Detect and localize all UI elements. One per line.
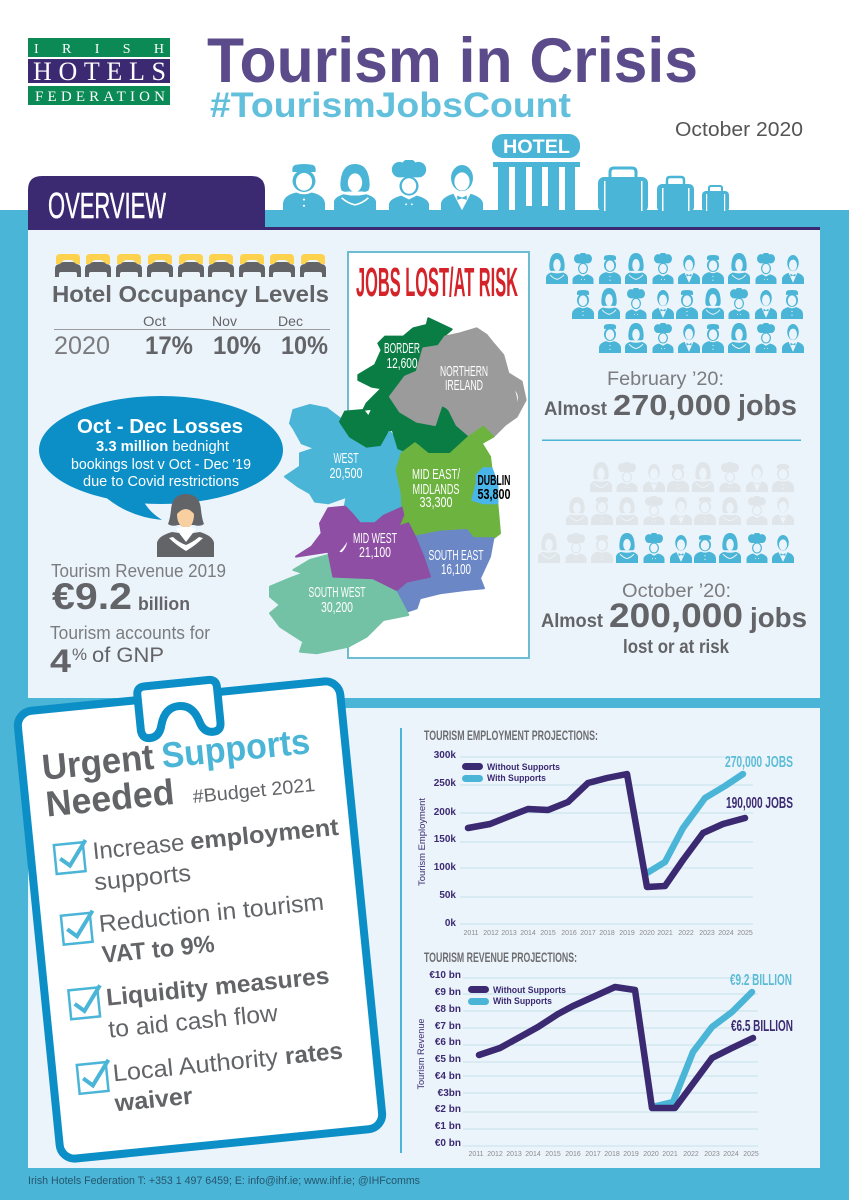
text: JOBS LOST/AT RISK <box>356 259 518 305</box>
legend: With Supports <box>487 773 546 784</box>
y axis labels: 0k <box>445 918 456 929</box>
x axis labels: 2016 <box>561 930 577 937</box>
x axis labels: 2011 <box>468 1151 484 1158</box>
x axis labels: 2021 <box>662 1151 678 1158</box>
logo: Irish Hotels Federation <box>28 38 170 105</box>
line: without supports <box>479 987 753 1108</box>
x axis labels: 2014 <box>520 930 536 937</box>
chart title: TOURISM REVENUE PROJECTIONS: <box>424 949 577 965</box>
y axis labels: 200k <box>434 807 456 818</box>
region: south west <box>270 555 408 653</box>
map labels: 30,200 <box>321 599 353 616</box>
callout: Oct - Dec losses: bookings lost v Oct - Dec '19 <box>71 456 251 473</box>
icon: bellhop <box>283 164 325 212</box>
y axis labels <box>434 750 456 929</box>
tourism revenue stat: €9.2 <box>52 576 132 617</box>
checklist item: rates waiver: rates <box>284 1038 344 1070</box>
x axis labels: 2018 <box>604 1151 620 1158</box>
y axis labels: €8 bn <box>435 1004 461 1015</box>
line: with supports <box>652 992 752 1107</box>
heading: urgent supports needed <box>40 720 315 825</box>
occupancy figures: 2020 <box>54 332 110 360</box>
x axis labels: 2019 <box>619 930 635 937</box>
checklist item: rates waiver <box>77 1037 347 1121</box>
month labels: Nov <box>212 313 237 329</box>
chart: tourism revenue projections <box>416 949 793 1158</box>
map labels: 16,100 <box>441 561 471 578</box>
y axis labels: 150k <box>434 834 456 845</box>
y axis labels: €5 bn <box>435 1054 461 1065</box>
x axis labels: 2021 <box>657 930 673 937</box>
map labels: 12,600 <box>386 355 418 372</box>
map labels: SOUTH WEST <box>308 584 366 601</box>
chart title: TOURISM EMPLOYMENT PROJECTIONS: <box>424 727 598 743</box>
GNP stat: % <box>72 645 87 664</box>
map labels <box>308 340 510 616</box>
x axis labels: 2013 <box>506 1151 522 1158</box>
map labels: 21,100 <box>359 544 391 561</box>
region: south east <box>395 530 493 612</box>
region: west <box>285 405 403 523</box>
clipboard: urgent supports needed <box>15 667 384 1160</box>
callout: Oct - Dec losses <box>39 396 283 520</box>
checklist item: employment supports: employment <box>189 814 340 856</box>
map labels: MID EAST/ <box>412 466 461 483</box>
checklist item: liquidity measures: to aid cash flow <box>107 1000 280 1044</box>
map labels: 53,800 <box>478 486 510 503</box>
map labels: IRELAND <box>445 377 483 394</box>
x axis labels: 2022 <box>678 930 694 937</box>
panel: jobs lost map <box>270 252 529 658</box>
x axis labels: 2015 <box>540 930 556 937</box>
x axis labels <box>463 930 753 937</box>
x axis labels: 2018 <box>599 930 615 937</box>
checklist item: employment supports: supports <box>93 860 192 896</box>
stat: October jobs: lost or at risk <box>623 637 729 658</box>
occupancy figures: 17% <box>145 332 193 360</box>
y axis labels: 50k <box>439 890 456 901</box>
stat: October jobs: October ’20: <box>622 581 731 602</box>
y axis title: Tourism Employment <box>417 798 428 886</box>
y axis labels: €6 bn <box>435 1037 461 1048</box>
checklist item: VAT reduction <box>61 888 328 973</box>
chart: tourism employment projections <box>417 727 793 937</box>
heading: urgent supports needed: Supports <box>159 720 312 776</box>
map labels: BORDER <box>384 340 420 357</box>
x axis labels: 2017 <box>585 1151 601 1158</box>
hashtag: #TourismJobsCount <box>210 86 571 125</box>
line: with supports <box>647 774 743 873</box>
map labels: MID WEST <box>353 530 397 547</box>
icon grid: October staff remaining <box>616 532 794 563</box>
stat: February jobs <box>544 369 797 422</box>
checklist item: rates waiver: Local Authority <box>112 1044 279 1087</box>
icon: large suitcase <box>598 168 648 212</box>
map labels: 20,500 <box>330 465 362 482</box>
icon grid: October staff faded <box>538 461 794 563</box>
icon: row of beds <box>55 254 326 277</box>
map labels: 33,300 <box>420 494 452 511</box>
x axis labels: 2025 <box>737 930 753 937</box>
callout: 6.5 billion: €6.5 BILLION <box>731 1018 793 1035</box>
x axis labels: 2020 <box>639 930 655 937</box>
GNP stat: 4 <box>50 643 71 679</box>
x axis labels: 2014 <box>525 1151 541 1158</box>
tourism revenue stat: billion <box>138 594 190 614</box>
map labels: WEST <box>334 450 358 467</box>
icon: hotel building: HOTEL <box>503 137 570 158</box>
stat: February jobs: Almost <box>544 399 608 420</box>
stat: October jobs: jobs <box>749 602 807 633</box>
checklist item: liquidity measures: Liquidity measures <box>105 963 331 1012</box>
panel: hotel occupancy <box>52 254 330 360</box>
GNP stat: Tourism accounts for <box>50 623 210 643</box>
panel: overview background <box>28 230 820 698</box>
x axis labels: 2011 <box>463 930 479 937</box>
panel: projections background <box>28 708 820 1168</box>
y axis labels: €2 bn <box>435 1104 461 1115</box>
icon: receptionist <box>334 164 376 212</box>
y axis labels: €0 bn <box>435 1138 461 1149</box>
x axis labels: 2017 <box>580 930 596 937</box>
month labels: Dec <box>278 313 303 329</box>
stat: October jobs <box>541 581 807 658</box>
checklist item: VAT reduction: VAT to 9% <box>101 931 216 969</box>
map labels: MIDLANDS <box>412 481 460 498</box>
x axis labels: 2015 <box>545 1151 561 1158</box>
region: dublin <box>472 468 497 503</box>
checklist item: VAT reduction: Reduction in tourism <box>98 889 325 938</box>
legend: Without Supports <box>487 762 560 773</box>
checklist item: liquidity measures <box>68 963 334 1047</box>
x axis labels: 2025 <box>743 1151 759 1158</box>
y axis labels: €10 bn <box>429 970 461 981</box>
y axis labels: 250k <box>434 778 456 789</box>
callout: Oct - Dec losses: due to Covid restrictions <box>83 473 239 490</box>
x axis labels: 2023 <box>704 1151 720 1158</box>
callout: 270,000 jobs: 270,000 JOBS <box>725 754 793 771</box>
icon grid: February staff <box>546 252 804 353</box>
month labels: Oct <box>143 313 166 329</box>
line: without supports <box>468 774 745 887</box>
region: mid west <box>296 507 430 590</box>
GNP stat: of GNP <box>92 644 164 667</box>
x axis labels: 2020 <box>643 1151 659 1158</box>
icon: receptionist speaking <box>157 494 214 557</box>
occupancy figures: 10% <box>281 332 328 360</box>
overview tab: OVERVIEW <box>48 185 166 226</box>
callout: Oct - Dec losses: Oct - Dec Losses <box>77 416 243 438</box>
icon: medium suitcase <box>657 177 694 212</box>
checklist item: employment supports <box>54 814 343 900</box>
x axis labels: 2012 <box>483 930 499 937</box>
heading: urgent supports needed: Needed <box>44 771 176 825</box>
stat: October jobs: 200,000 <box>609 597 743 635</box>
x axis labels: 2013 <box>501 930 517 937</box>
footer contact line: Irish Hotels Federation T: +353 1 497 6459; E: info@ihf.ie; www.ihf.ie; @IHFcomms <box>28 1175 420 1187</box>
map labels: DUBLIN <box>478 472 510 489</box>
region: border <box>340 318 469 454</box>
x axis labels: 2022 <box>683 1151 699 1158</box>
x axis labels: 2024 <box>723 1151 739 1158</box>
y axis labels: 100k <box>434 862 456 873</box>
legend <box>462 762 560 784</box>
y axis labels: 300k <box>434 750 456 761</box>
overview tab <box>28 176 820 230</box>
icon: clipboard clip <box>137 679 221 739</box>
x axis labels <box>468 1151 759 1158</box>
y axis labels: €1 bn <box>435 1121 461 1132</box>
heading: urgent supports needed: Urgent <box>40 736 156 788</box>
checklist item: employment supports: Increase <box>91 829 186 865</box>
x axis labels: 2016 <box>565 1151 581 1158</box>
region: northern ireland <box>390 328 526 437</box>
icon: chef <box>389 159 429 212</box>
y axis labels: €4 bn <box>435 1071 461 1082</box>
occupancy figures <box>54 332 328 360</box>
logo: Irish Hotels Federation: IRISH <box>34 42 164 57</box>
legend: Without Supports <box>493 985 566 996</box>
staff and hotel illustration <box>283 134 729 212</box>
callout: 9.2 billion: €9.2 BILLION <box>730 972 792 989</box>
stat: October jobs: Almost <box>541 611 604 632</box>
x axis labels: 2012 <box>487 1151 503 1158</box>
logo: Irish Hotels Federation: HOTELS <box>33 57 166 86</box>
legend <box>468 985 566 1007</box>
stat: February jobs: jobs <box>737 390 797 422</box>
x axis labels: 2019 <box>623 1151 639 1158</box>
checklist item: rates waiver: waiver <box>112 1083 194 1117</box>
tourism revenue stat: Tourism Revenue 2019 <box>51 561 226 581</box>
y axis labels <box>429 970 461 1149</box>
icon: waiter <box>441 165 483 212</box>
date: October 2020 <box>675 119 803 141</box>
tourism revenue stat <box>51 561 226 617</box>
GNP stat <box>50 623 210 679</box>
region: mid east and midlands <box>397 427 500 540</box>
legend: With Supports <box>493 996 552 1007</box>
callout: 190,000 jobs: 190,000 JOBS <box>726 795 793 812</box>
heading: hotel occupancy levels: Hotel Occupancy Levels <box>52 281 329 307</box>
map labels: SOUTH EAST <box>428 547 484 564</box>
hashtag: budget 2021: #Budget 2021 <box>192 775 316 808</box>
callout: Oct - Dec losses: 3.3 million bednight <box>96 438 230 455</box>
occupancy figures: 10% <box>213 332 261 360</box>
y axis labels: €7 bn <box>435 1021 461 1032</box>
y axis title: Tourism Revenue <box>416 1018 427 1090</box>
x axis labels: 2023 <box>699 930 715 937</box>
x axis labels: 2024 <box>718 930 734 937</box>
icon: small suitcase <box>702 186 729 212</box>
title: Tourism in Crisis <box>207 26 698 96</box>
y axis labels: €9 bn <box>435 987 461 998</box>
map of Ireland <box>270 318 526 653</box>
month labels <box>143 313 303 329</box>
stat: February jobs: 270,000 <box>613 390 731 422</box>
map labels: NORTHERN <box>440 363 488 380</box>
stat: February jobs: February ’20: <box>607 369 724 390</box>
y axis labels: €3bn <box>438 1088 461 1099</box>
logo: Irish Hotels Federation: FEDERATION <box>35 89 165 105</box>
icon: hotel building <box>492 134 580 212</box>
